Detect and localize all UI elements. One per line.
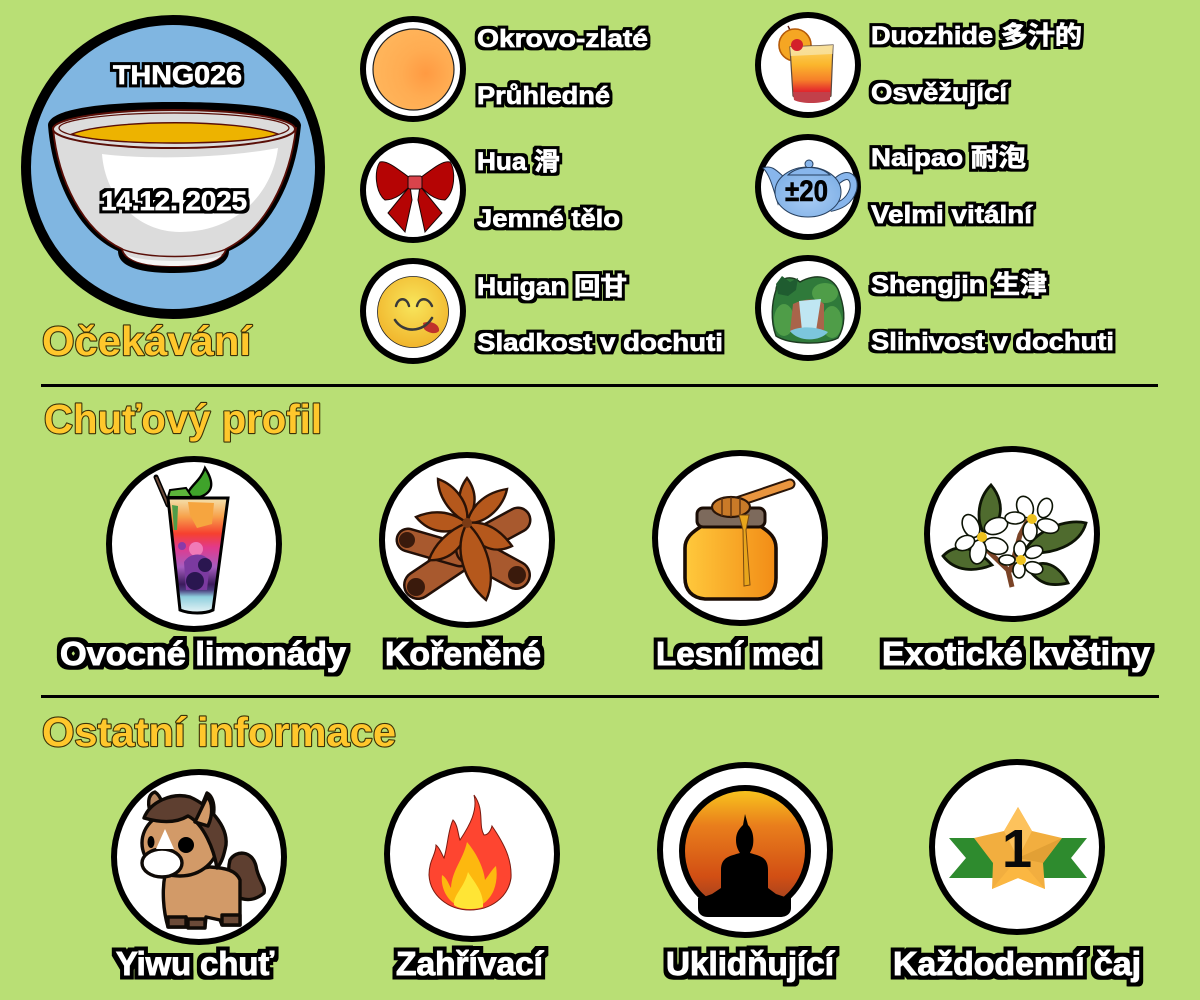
label: Ovocné limonády xyxy=(60,635,347,672)
item: Shengjin xyxy=(758,258,1114,358)
text: refreshing: Osvěžující xyxy=(871,79,1008,107)
text: salivation: Slinivost v dochuti xyxy=(871,328,1114,356)
icon: blue teapot xyxy=(763,160,854,217)
item: Duozhide xyxy=(758,15,1082,115)
icon: meditating silhouette xyxy=(682,788,808,917)
text: body: Jemné tělo xyxy=(477,205,620,233)
text: Duozhide: Duozhide 多汁的 xyxy=(871,22,1082,50)
item: daily tea xyxy=(893,762,1141,982)
code: THNG026 xyxy=(113,60,242,90)
heading: Ostatní informace: Ostatní informace xyxy=(42,709,396,755)
item: calming xyxy=(660,765,836,982)
item: warming xyxy=(387,769,557,982)
label: Zahřívací xyxy=(396,945,545,982)
heading: Chuťový profil: Chuťový profil xyxy=(44,396,322,442)
item: Hua xyxy=(363,140,620,240)
teapot number: ±20 xyxy=(785,175,828,208)
icon: red bow xyxy=(376,162,454,232)
icon: lemonade glass xyxy=(156,468,228,613)
text: vitality: Velmi vitální xyxy=(871,201,1033,229)
label: Uklidňující xyxy=(666,945,836,982)
icon: iced cocktail xyxy=(779,26,833,103)
text: sweet aftertaste: Sladkost v dochuti xyxy=(477,329,723,357)
text: colour: Okrovo-zlaté xyxy=(477,25,648,53)
text: Hua: Hua 滑 xyxy=(477,148,560,176)
label: Kořeněné xyxy=(385,635,541,672)
icon: honey jar xyxy=(685,484,790,599)
icon: star with ribbon xyxy=(949,807,1087,889)
panel: tea badge xyxy=(26,20,320,314)
item: spicy xyxy=(382,455,552,672)
item: Naipao xyxy=(758,137,1033,237)
item: exotic flowers xyxy=(882,449,1151,672)
item: forest honey xyxy=(655,453,825,672)
label: Každodenní čaj xyxy=(893,945,1141,982)
icon: jungle waterfall xyxy=(772,276,844,343)
rank number: 1 xyxy=(1002,819,1032,879)
icon: star anise and cinnamon xyxy=(399,478,526,600)
icon: tea bowl xyxy=(48,102,301,273)
label: Exotické květiny xyxy=(882,635,1151,672)
heading: Očekávání: Očekávání xyxy=(42,318,253,364)
text: Huigan: Huigan 回甘 xyxy=(477,273,627,301)
icon: flowering branch xyxy=(943,485,1086,587)
label: Lesní med xyxy=(656,635,820,672)
item: colour xyxy=(363,19,648,119)
icon: liquor colour xyxy=(373,29,454,110)
text: clarity: Průhledné xyxy=(477,82,610,110)
icon: flame xyxy=(429,795,511,910)
icon: smiling face xyxy=(378,276,448,348)
item: Huigan xyxy=(363,261,723,361)
text: Naipao: Naipao 耐泡 xyxy=(871,144,1026,172)
text: Shengjin: Shengjin 生津 xyxy=(871,271,1047,299)
label: Yiwu chuť xyxy=(116,945,274,982)
icon: cute horse xyxy=(142,792,264,928)
date: 14.12. 2025 xyxy=(101,186,247,216)
item: fruit lemonades xyxy=(60,459,347,672)
item: Yiwu taste xyxy=(114,772,284,982)
